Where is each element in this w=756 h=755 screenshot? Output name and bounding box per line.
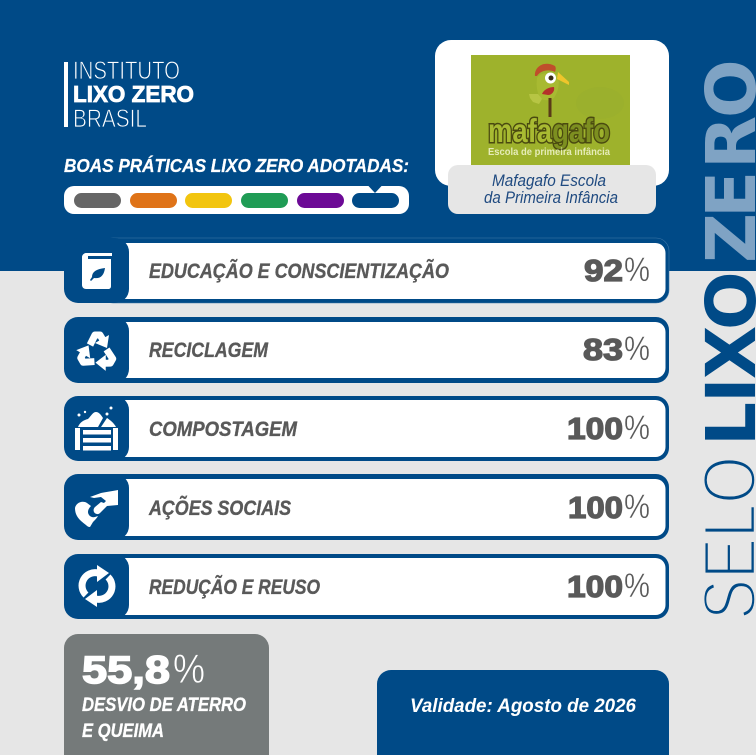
- school logo image: mafagafo: [488, 112, 610, 149]
- logo: Instituto Lixo Zero Brasil: INSTITUTO: [73, 57, 180, 85]
- logo: Instituto Lixo Zero Brasil: BRASIL: [73, 105, 147, 133]
- panel: validade: Validade: Agosto de 2026: [410, 696, 636, 717]
- row: compostagem: 100: [567, 411, 623, 446]
- panel: validade: [377, 670, 669, 755]
- logo: Instituto Lixo Zero Brasil: LIXO ZERO: [73, 81, 194, 107]
- row: redução e reuso: [64, 554, 669, 619]
- row: educação e conscientização: 92: [584, 253, 623, 288]
- row: educação e conscientização: %: [624, 251, 650, 289]
- panel: desvio de aterro e queima: %: [173, 646, 205, 692]
- row: compostagem: COMPOSTAGEM: [149, 418, 297, 441]
- row: compostagem: [64, 396, 669, 461]
- row: reciclagem: 83: [583, 332, 623, 367]
- panel: desvio de aterro e queima: DESVIO DE ATERRO: [82, 695, 246, 716]
- row: ações sociais: %: [624, 488, 650, 526]
- panel: desvio de aterro e queima: 55,8: [82, 649, 170, 692]
- logo: Instituto Lixo Zero Brasil: [64, 57, 194, 133]
- school logo image: Escola de primeira infância: [488, 146, 610, 158]
- row: ações sociais: 100: [568, 490, 623, 525]
- row: reciclagem: %: [624, 330, 650, 368]
- category colour legend: [64, 186, 409, 214]
- school name label: [448, 165, 656, 214]
- school logo image: [471, 55, 630, 165]
- vertical title: selo lixo zero: [688, 59, 756, 620]
- row: educação e conscientização: EDUCAÇÃO E CONSCIENTIZAÇÃO: [149, 260, 449, 283]
- row: ações sociais: AÇÕES SOCIAIS: [148, 496, 291, 520]
- row: educação e conscientização: [64, 238, 669, 303]
- panel: desvio de aterro e queima: [64, 634, 269, 755]
- icon: book with leaf: [82, 253, 112, 289]
- blue header background: [0, 0, 756, 271]
- icon: refresh arrows: [82, 565, 112, 607]
- row: ações sociais: [64, 474, 669, 540]
- row: compostagem: %: [624, 409, 650, 447]
- school logo card: [435, 40, 669, 214]
- panel: desvio de aterro e queima: E QUEIMA: [82, 721, 164, 742]
- row: reciclagem: [64, 317, 669, 383]
- icon: recycling arrows: [76, 335, 115, 371]
- row: redução e reuso: REDUÇÃO E REUSO: [149, 576, 320, 599]
- row: redução e reuso: %: [624, 567, 650, 605]
- icon: hand holding heart: [75, 490, 118, 527]
- heading: boas práticas: BOAS PRÁTICAS LIXO ZERO ADOTADAS:: [64, 155, 409, 176]
- school name label: da Primeira Infância: [484, 188, 618, 207]
- icon: compost crate: [75, 406, 118, 450]
- row: redução e reuso: 100: [567, 569, 623, 604]
- school name label: Mafagafo Escola: [492, 171, 606, 190]
- row: reciclagem: RECICLAGEM: [149, 339, 268, 362]
